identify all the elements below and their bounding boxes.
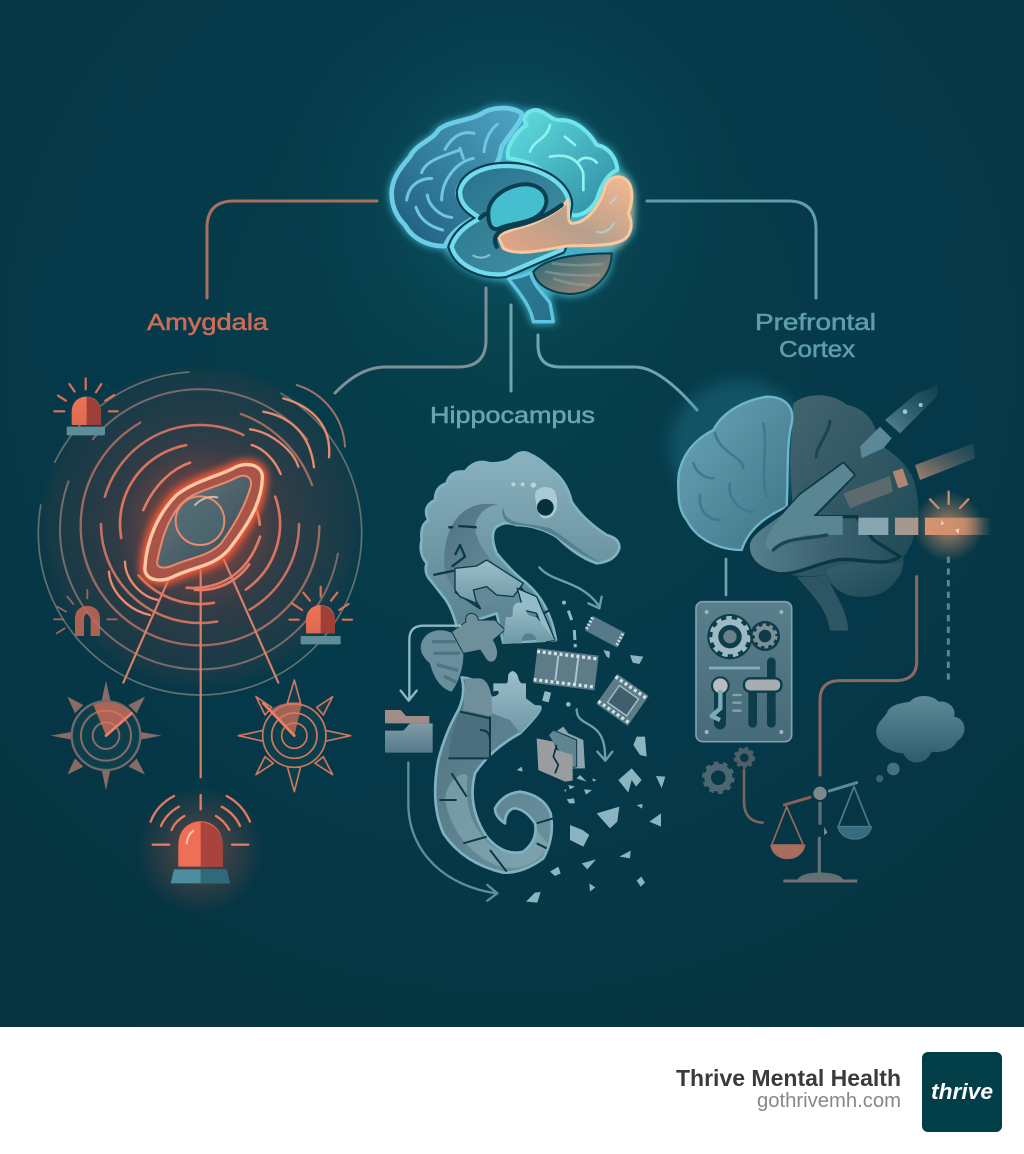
left lobe (392, 108, 522, 246)
connector: brain to amygdala lower (335, 288, 486, 393)
alarm top left (54, 378, 118, 435)
small gears (704, 748, 763, 823)
footer band (0, 1027, 1024, 1154)
amygdala eye shape (145, 465, 262, 580)
balance scale (771, 783, 872, 881)
light left lobe (678, 397, 792, 550)
footer logo (922, 1052, 1002, 1132)
gap in body (457, 620, 560, 698)
trigger lines (123, 560, 278, 777)
arrow to folder shards (577, 709, 612, 761)
connector: brain to amygdala (207, 201, 377, 298)
puzzle pieces (452, 613, 505, 662)
alarm right (289, 587, 352, 644)
brain stem (508, 273, 553, 322)
arrow from folder (408, 763, 497, 901)
connector to scale (820, 577, 917, 775)
film strip curled (596, 674, 649, 726)
broken tape upper (860, 427, 892, 458)
shards (517, 650, 665, 903)
brain stem (797, 575, 848, 631)
arrow down to folder (401, 626, 460, 701)
cerebellum (827, 563, 902, 597)
central temporal shape (452, 166, 569, 274)
arrow to film (539, 567, 602, 608)
broken tape middle (843, 476, 893, 508)
hippocampus seahorse illustration (385, 452, 665, 903)
label: Prefrontal Cortex: Cortex (779, 336, 856, 362)
footer brand name: Thrive Mental Health (676, 1065, 901, 1091)
vertical connector to panel (722, 559, 730, 595)
prefrontal cortex illustration (670, 380, 992, 881)
concentric alert rings (0, 312, 421, 754)
connector: brain to hippocampus (510, 305, 512, 391)
sulci lines (407, 124, 497, 230)
label: Hippocampus: Hippocampus (430, 402, 595, 428)
radar left (51, 681, 162, 791)
dashed down line (944, 557, 953, 682)
control panel (696, 602, 792, 742)
upper right lobe (508, 110, 617, 215)
alarm bottom glowing (137, 787, 263, 913)
radar right (238, 680, 351, 792)
folder (385, 710, 433, 753)
connector: brain to prefrontal cortex (647, 201, 816, 298)
dashed pathway (858, 518, 888, 535)
label: Prefrontal Cortex: Prefrontal (755, 309, 876, 335)
main brain illustration (392, 108, 633, 322)
label: Amygdala: Amygdala (147, 309, 268, 335)
seahorse lower body (435, 677, 552, 873)
alarm left faint (54, 590, 117, 636)
film strip small (585, 616, 625, 648)
seahorse eye (535, 487, 557, 518)
seahorse upper body (421, 452, 619, 643)
connector: brain to prefrontal illustration (538, 335, 697, 410)
fin (421, 630, 463, 692)
orange lobe (498, 177, 632, 252)
folder broken (537, 727, 585, 782)
thought cloud (876, 696, 965, 782)
amygdala illustration (0, 312, 421, 913)
upper cracks (433, 526, 550, 622)
cerebellum (533, 253, 612, 294)
footer website: gothrivemh.com (757, 1090, 901, 1112)
film strip large (533, 648, 599, 690)
dashes (562, 601, 566, 605)
dark right lobe (783, 395, 918, 597)
footer logo: thrive (931, 1079, 993, 1104)
central blob (488, 184, 546, 229)
temporal fold (748, 463, 900, 574)
